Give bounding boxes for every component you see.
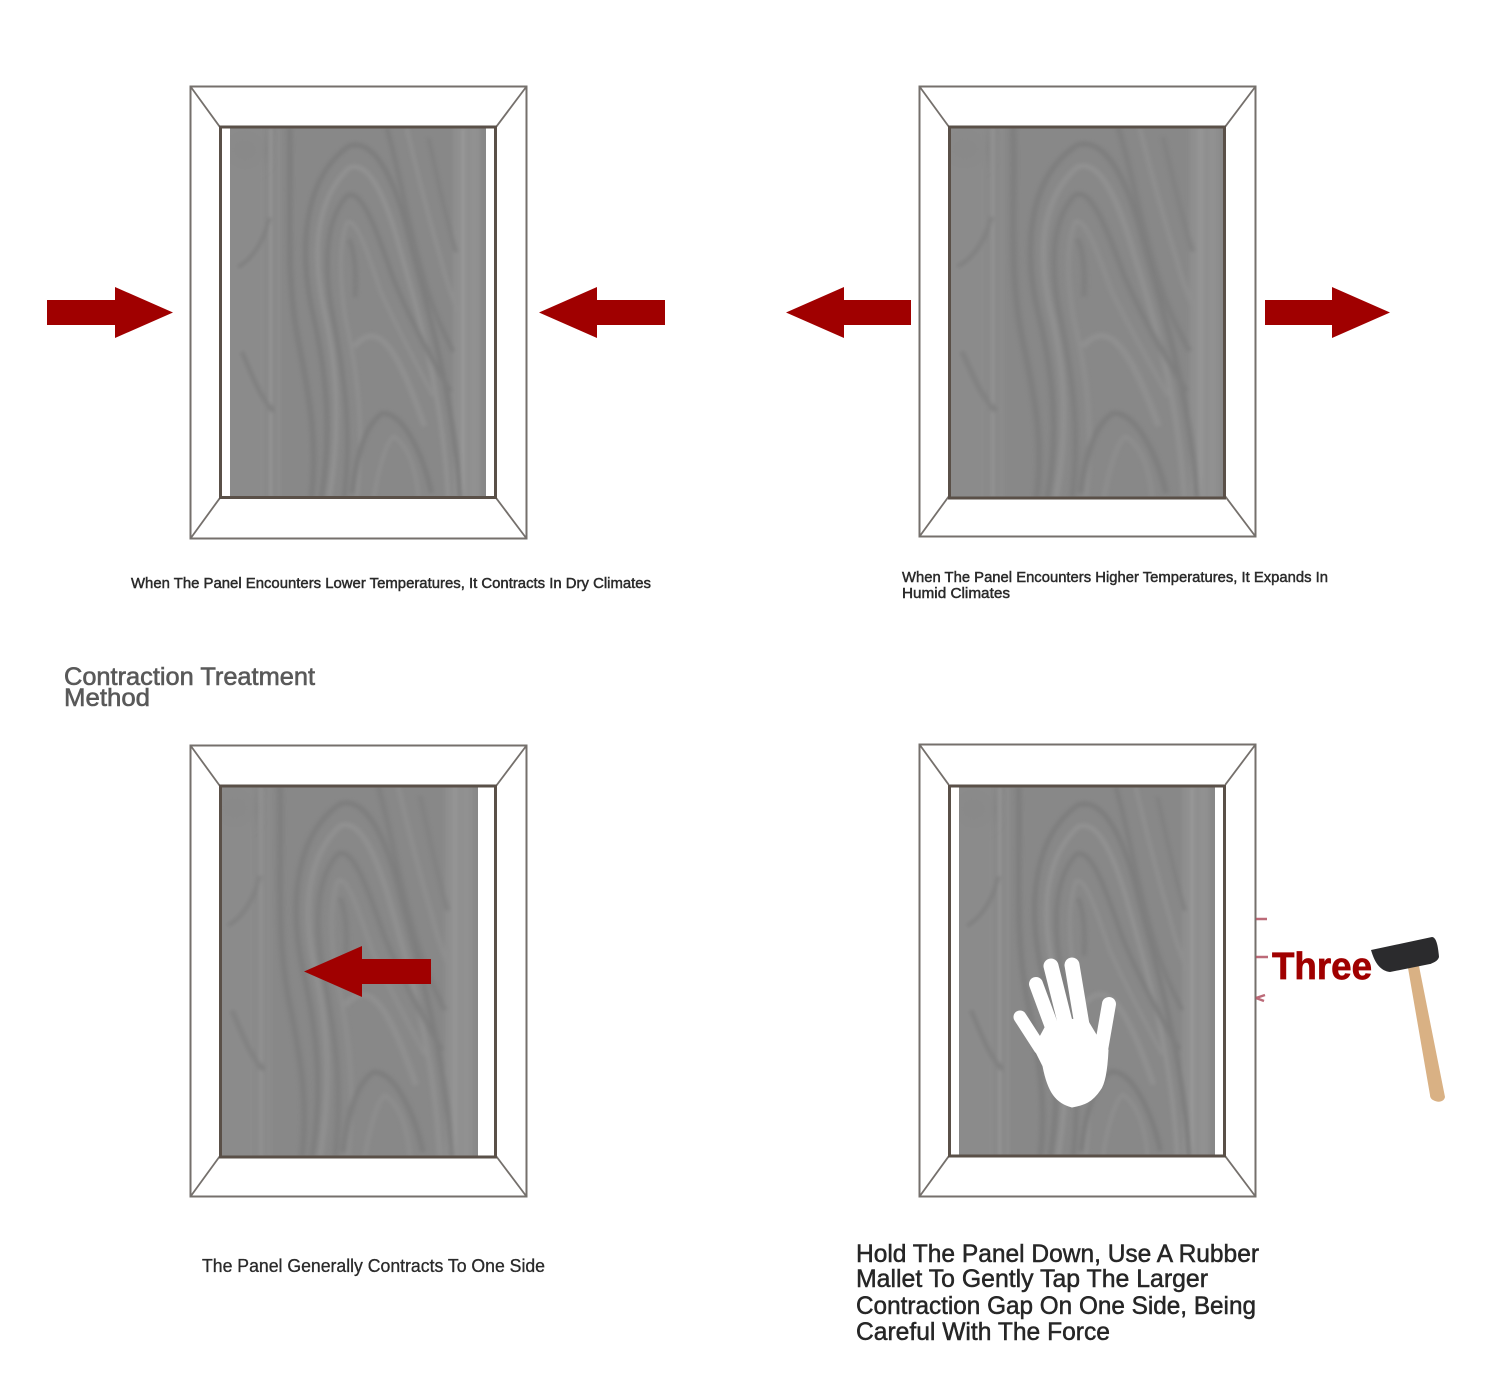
arrow: expanding to left (786, 287, 911, 338)
wood panel (944, 122, 1225, 503)
frame (920, 86, 1255, 537)
arrow: expanding to right (1265, 287, 1390, 338)
icon: white hand (1020, 965, 1109, 1107)
wood panel (225, 123, 486, 503)
icon: rubber mallet (1371, 937, 1445, 1102)
heading: contraction treatment method (64, 663, 315, 712)
inner frame edge (220, 127, 496, 498)
caption: one side: The Panel Generally Contracts To One Side (202, 1256, 545, 1276)
arrow: pressing inward from right (539, 287, 665, 338)
mallet handle (1408, 966, 1445, 1102)
frame (920, 745, 1255, 1196)
caption: expansion: When The Panel Encounters Higher Temperatures, It Expands In (902, 570, 1328, 586)
wood panel (215, 781, 478, 1162)
instruction text: Contraction Gap On One Side, Being (856, 1292, 1256, 1320)
mallet head (1371, 937, 1439, 972)
caption: expansion: Humid Climates (902, 586, 1010, 602)
panel: panel contracted to one side (191, 746, 526, 1196)
instruction text: Mallet To Gently Tap The Larger (856, 1265, 1208, 1293)
panel: contraction in dry climates (191, 87, 526, 538)
arrow: pressing inward from left (47, 287, 173, 338)
frame (191, 746, 526, 1196)
inner frame edge (950, 127, 1224, 498)
label: three: Three (1272, 946, 1372, 988)
arrow: contraction direction (304, 946, 431, 997)
frame (191, 87, 526, 538)
instruction text (856, 1240, 1259, 1346)
panel: tapping with a mallet (920, 745, 1255, 1196)
panel: expansion in humid climates (920, 86, 1255, 537)
wood panel (954, 782, 1215, 1161)
heading: contraction treatment method: Contraction Treatment (64, 663, 315, 691)
inner frame edge (220, 786, 496, 1157)
icon: impact ticks (1256, 919, 1268, 1001)
caption: contraction: When The Panel Encounters Lower Temperatures, It Contracts In Dry Climates (131, 576, 651, 592)
instruction text: Hold The Panel Down, Use A Rubber (856, 1240, 1259, 1268)
instruction text: Careful With The Force (856, 1318, 1110, 1346)
inner frame edge (950, 786, 1224, 1156)
heading: contraction treatment method: Method (64, 684, 150, 712)
caption: expansion (902, 570, 1328, 602)
